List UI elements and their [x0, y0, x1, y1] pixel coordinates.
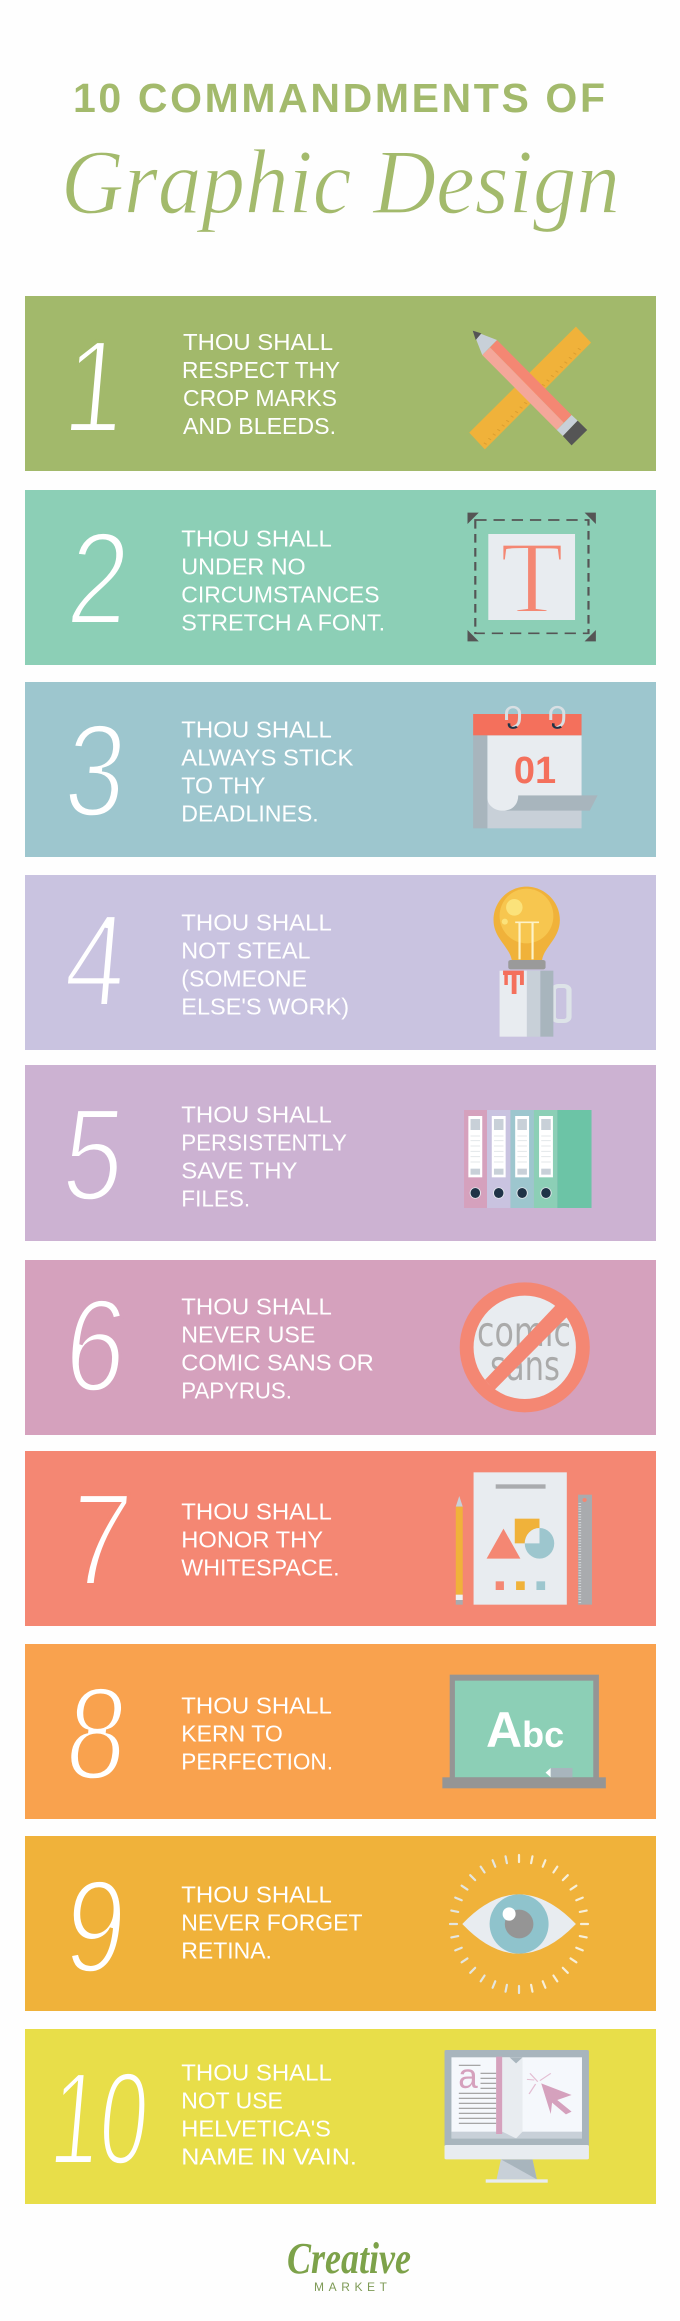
- number 5: 5: [57, 1080, 131, 1228]
- commandment text: NEVER USE: [181, 1321, 315, 1347]
- icon: ruler and pencil: [469, 327, 591, 449]
- commandment text: AND BLEEDS.: [183, 413, 336, 439]
- icon: chalkboard: [442, 1675, 606, 1788]
- commandment text: PERSISTENTLY: [181, 1130, 347, 1156]
- commandment text: [181, 717, 354, 827]
- panel 2: stretch a font: [25, 490, 656, 665]
- commandment text: THOU SHALL: [181, 1692, 332, 1718]
- number 1: 1: [58, 312, 132, 460]
- commandment text: ALWAYS STICK: [181, 745, 354, 771]
- icon: no comic sans sign: [460, 1282, 590, 1412]
- panel background: [25, 1260, 656, 1435]
- logo: Creative Market: [287, 2234, 411, 2294]
- icon: layout with pencil and ruler: [456, 1472, 592, 1605]
- icon: monitor with book: [445, 2050, 589, 2183]
- icon: calendar: [473, 707, 598, 828]
- commandment text: [181, 1882, 362, 1964]
- commandment text: THOU SHALL: [181, 910, 332, 936]
- panel background: [25, 1451, 656, 1626]
- panel 9: retina: [25, 1836, 656, 2011]
- panel background: [25, 2029, 656, 2204]
- commandment text: [181, 1102, 347, 1212]
- panel background: [25, 1065, 656, 1241]
- commandment text: CROP MARKS: [183, 385, 337, 411]
- title line 1: 10 COMMANDMENTS OF: [73, 75, 605, 121]
- commandment text: CIRCUMSTANCES: [181, 582, 380, 608]
- commandment text: PAPYRUS.: [181, 1377, 292, 1403]
- number 4: 4: [59, 886, 133, 1034]
- title: [61, 75, 620, 233]
- icon: calendar: 01: [514, 750, 556, 792]
- icon: monitor with book: a: [458, 2057, 478, 2096]
- panel background: [25, 1644, 656, 1819]
- panel 8: kerning: [25, 1644, 656, 1819]
- commandment text: NOT USE: [181, 2087, 283, 2113]
- commandment text: [181, 1692, 333, 1774]
- panel 5: save thy files: [25, 1065, 656, 1241]
- commandment text: THOU SHALL: [181, 717, 332, 743]
- panel 4: do not steal: [25, 875, 656, 1050]
- commandment text: HONOR THY: [181, 1526, 323, 1552]
- icon: light bulb in mug: [494, 887, 569, 1037]
- commandment text: NEVER FORGET: [181, 1910, 362, 1936]
- commandment text: [181, 2059, 357, 2169]
- commandment text: NAME IN VAIN.: [181, 2143, 357, 2169]
- commandment text: [182, 329, 340, 439]
- title line 2 script: Graphic Design: [61, 131, 620, 233]
- commandment text: [181, 1293, 374, 1403]
- panel 7: whitespace: [25, 1451, 656, 1626]
- commandment text: THOU SHALL: [183, 329, 333, 355]
- icon: text box with T: T: [501, 521, 563, 635]
- icon: no comic sans sign: comic: [477, 1308, 571, 1356]
- commandment text: HELVETICA'S: [181, 2115, 331, 2141]
- commandment text: THOU SHALL: [181, 1102, 332, 1128]
- commandment text: NOT STEAL: [181, 938, 311, 964]
- commandment text: (SOMEONE: [181, 966, 307, 992]
- commandment text: [181, 910, 349, 1020]
- commandment text: DEADLINES.: [181, 801, 319, 827]
- icon: text box with T: [467, 513, 596, 641]
- icon: no comic sans sign: sans: [490, 1342, 560, 1390]
- panel background: [25, 1836, 656, 2011]
- commandment text: KERN TO: [181, 1720, 283, 1746]
- number 7: 7: [63, 1465, 137, 1613]
- commandment text: UNDER NO: [181, 554, 306, 580]
- number 3: 3: [59, 696, 133, 844]
- panel background: [25, 296, 656, 471]
- commandment text: THOU SHALL: [181, 526, 332, 552]
- icon: chalkboard: Abc: [486, 1702, 564, 1758]
- commandment text: PERFECTION.: [181, 1748, 333, 1774]
- commandment text: THOU SHALL: [181, 1882, 332, 1908]
- icon: eye with rays: [450, 1855, 588, 1993]
- commandment text: FILES.: [181, 1186, 250, 1212]
- number 2: 2: [62, 504, 136, 652]
- panel background: [25, 682, 656, 857]
- panel 1: crop marks: [25, 296, 656, 471]
- commandment text: SAVE THY: [181, 1158, 298, 1184]
- number 8: 8: [60, 1659, 134, 1807]
- commandment text: RESPECT THY: [182, 357, 340, 383]
- logo wordmark: Creative: [287, 2234, 411, 2283]
- panel 10: Helvetica: [25, 2029, 656, 2204]
- commandment text: STRETCH A FONT.: [181, 610, 385, 636]
- commandment text: ELSE'S WORK): [181, 994, 349, 1020]
- panel background: [25, 490, 656, 665]
- commandment text: THOU SHALL: [181, 1293, 332, 1319]
- commandment text: THOU SHALL: [181, 1498, 332, 1524]
- commandment text: THOU SHALL: [181, 2059, 332, 2085]
- logo subline: MARKET: [314, 2280, 388, 2294]
- commandment text: [181, 526, 385, 636]
- number 10: 10: [45, 2044, 155, 2192]
- icon: binders: [464, 1110, 592, 1208]
- commandment text: TO THY: [181, 773, 265, 799]
- number 6: 6: [59, 1271, 133, 1419]
- panel 3: deadlines: [25, 682, 656, 857]
- panel 6: no comic sans: [25, 1260, 656, 1435]
- commandment text: [181, 1498, 340, 1580]
- commandment text: WHITESPACE.: [181, 1554, 340, 1580]
- commandment text: RETINA.: [181, 1938, 272, 1964]
- commandment text: COMIC SANS OR: [181, 1349, 374, 1375]
- panel background: [25, 875, 656, 1050]
- number 9: 9: [59, 1852, 133, 2000]
